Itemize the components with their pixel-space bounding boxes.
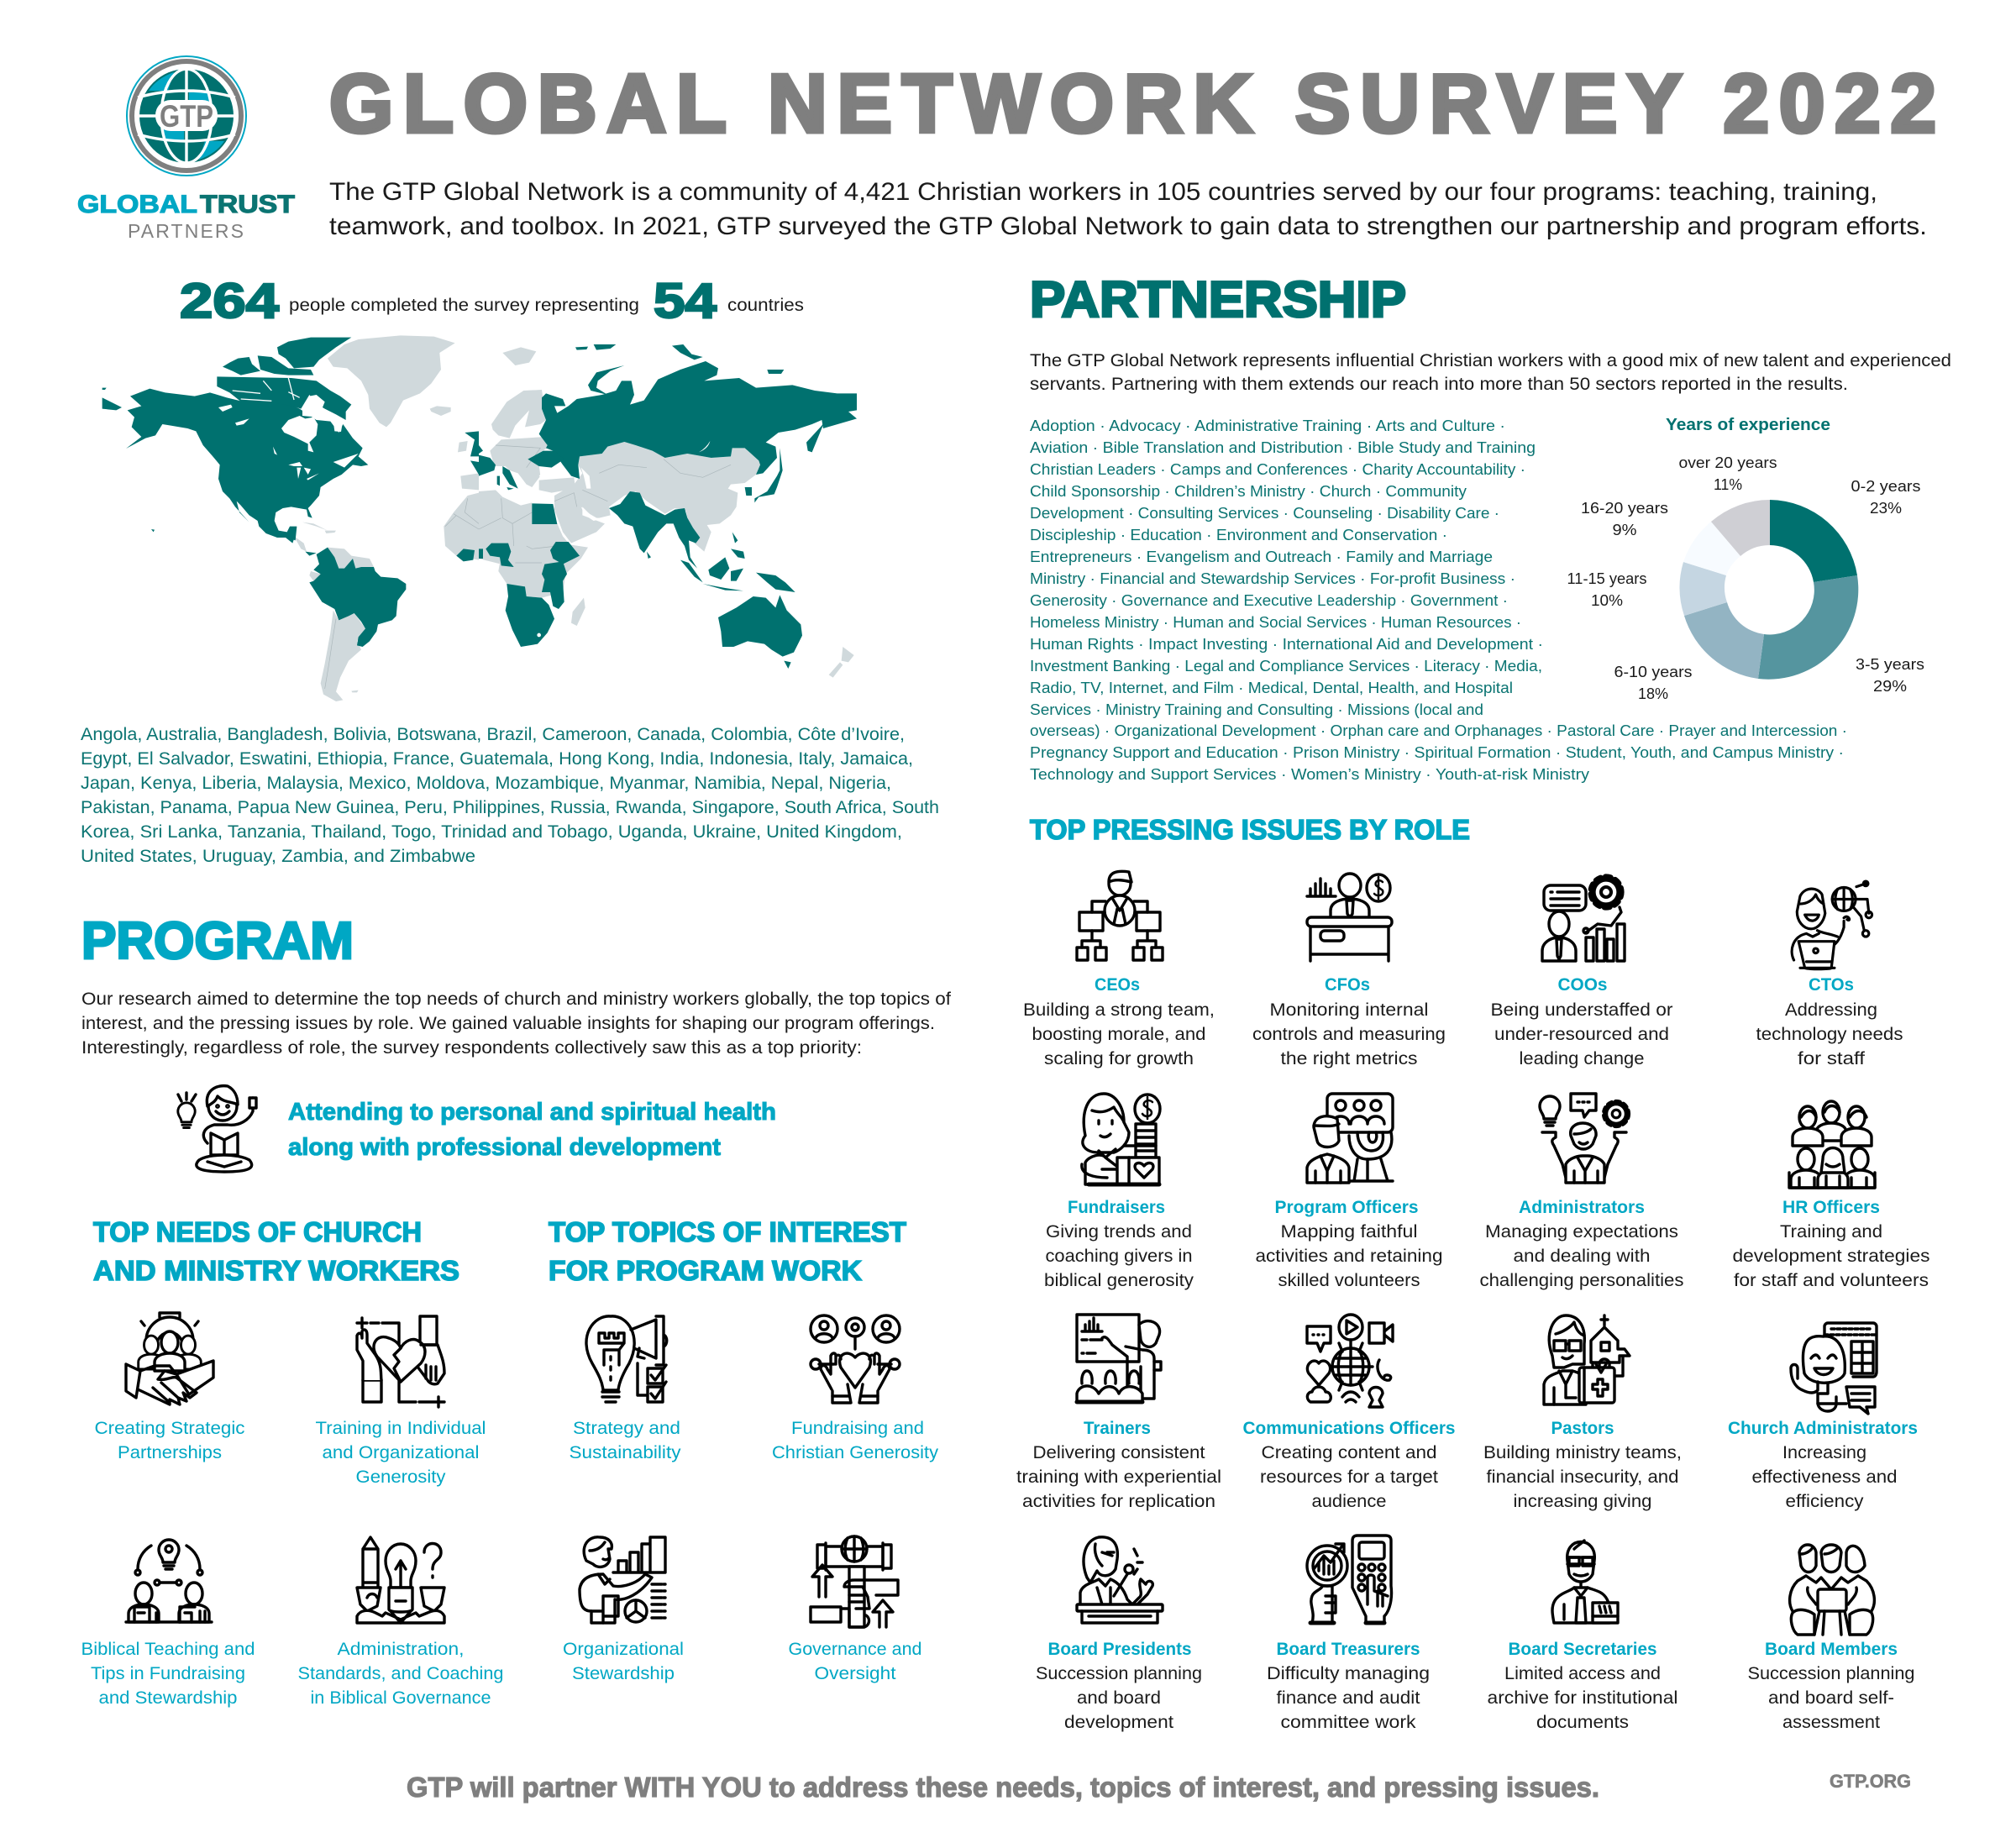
donut labels: 23%	[1870, 499, 1902, 517]
role: Board Treasurers: finance and audit	[1277, 1688, 1420, 1708]
callout: top priority	[288, 1099, 776, 1161]
icon: org chart person	[1077, 871, 1163, 960]
role: CFOs: the right metrics	[1280, 1049, 1418, 1068]
callout: top priority: Attending to personal and spiritual health	[288, 1099, 776, 1126]
needs and topics labels: Christian Generosity	[772, 1443, 939, 1462]
survey stats: 264	[180, 274, 279, 328]
intro paragraph: The GTP Global Network is a community of 4,421 Christian workers in 105 countries served by our four programs: teaching, training,	[329, 178, 1877, 206]
role: Church Administrators: Church Administrators	[1728, 1419, 1918, 1438]
role: Program Officers: activities and retaining	[1255, 1247, 1443, 1266]
country list: Japan, Kenya, Liberia, Malaysia, Mexico, Moldova, Mozambique, Myanmar, Namibia, Nepal, Nigeria,	[81, 774, 891, 793]
program intro paragraph: Our research aimed to determine the top needs of church and ministry workers globally, the top topics of	[81, 990, 951, 1009]
role: Communications Officers	[1243, 1315, 1455, 1511]
sector list: Child Sponsorship · Children’s Ministry · Church · Community	[1030, 482, 1467, 500]
needs and topics labels: Training in Individual	[316, 1419, 486, 1438]
role: Communications Officers: Creating content and	[1262, 1443, 1436, 1462]
role: COOs: under-resourced and	[1494, 1025, 1669, 1044]
heading: partnership: PARTNERSHIP	[1030, 271, 1406, 328]
donut labels: 29%	[1873, 677, 1907, 695]
needs and topics labels: Sustainability	[570, 1443, 681, 1462]
icon: man with glasses and folder	[1552, 1541, 1618, 1623]
role: Board Members	[1747, 1545, 1915, 1732]
survey stats: 54	[654, 274, 717, 328]
needs and topics labels: Stewardship	[572, 1664, 675, 1683]
partnership paragraph: The GTP Global Network represents influential Christian workers with a good mix of new talent and experienced	[1030, 351, 1951, 370]
world map	[102, 335, 857, 701]
role: Fundraisers: coaching givers in	[1045, 1247, 1193, 1266]
heading: program: PROGRAM	[81, 912, 354, 970]
role: COOs: Being understaffed or	[1490, 1000, 1673, 1020]
role: HR Officers: development strategies	[1732, 1247, 1930, 1266]
icon: bulb with rook and megaphone	[586, 1316, 667, 1402]
needs and topics labels: Administration,	[338, 1640, 464, 1659]
icon: group of staff	[1789, 1101, 1875, 1188]
role: Administrators: Administrators	[1519, 1198, 1645, 1217]
role: Administrators: and dealing with	[1514, 1247, 1650, 1266]
role: Board Treasurers: Board Treasurers	[1277, 1640, 1420, 1659]
icon: woman with coins and heart box	[1082, 1094, 1160, 1184]
role: Pastors	[1483, 1315, 1682, 1511]
logo: Global Trust Partners: GTP	[160, 99, 213, 134]
role: Pastors: Pastors	[1551, 1419, 1614, 1438]
program intro paragraph	[81, 990, 951, 1058]
role: Board Treasurers: Difficulty managing	[1267, 1664, 1430, 1683]
role: HR Officers	[1732, 1101, 1930, 1290]
heading: top needs: TOP NEEDS OF CHURCH	[93, 1216, 422, 1247]
role: Board Members: Succession planning	[1747, 1664, 1915, 1683]
role: Church Administrators: Increasing	[1782, 1443, 1866, 1462]
icon: heart and hands	[357, 1316, 444, 1407]
role: Board Secretaries: archive for institutional	[1487, 1688, 1678, 1708]
role: Administrators: Managing expectations	[1485, 1222, 1678, 1242]
role: Pastors: increasing giving	[1514, 1492, 1651, 1511]
donut labels: 10%	[1591, 591, 1623, 609]
role: Board Presidents	[1036, 1537, 1202, 1732]
role: Board Presidents: development	[1064, 1713, 1173, 1732]
donut labels: 16-20 years	[1581, 499, 1668, 517]
program intro paragraph: Interestingly, regardless of role, the survey respondents collectively saw this as a top priority:	[81, 1038, 862, 1058]
needs and topics labels: in Biblical Governance	[311, 1688, 491, 1708]
icon: board around a table	[1790, 1545, 1874, 1635]
country list: United States, Uruguay, Zambia, and Zimbabwe	[81, 847, 475, 866]
role: COOs: leading change	[1519, 1049, 1645, 1068]
sector list: Homeless Ministry · Human and Social Services · Human Resources ·	[1030, 613, 1521, 631]
donut chart: years of experience	[1680, 500, 1858, 680]
role: COOs: COOs	[1557, 975, 1608, 995]
program intro paragraph: interest, and the pressing issues by role. We gained valuable insights for shaping our program offerings.	[81, 1014, 935, 1033]
role: Trainers: activities for replication	[1022, 1492, 1215, 1511]
country list	[81, 725, 939, 866]
role: Church Administrators: effectiveness and	[1752, 1467, 1897, 1487]
role: Pastors: financial insecurity, and	[1487, 1467, 1678, 1487]
closing statement: GTP will partner WITH YOU to address these needs, topics of interest, and pressing issues.	[407, 1772, 1599, 1803]
icon: pastor with church and bible	[1544, 1315, 1630, 1404]
donut labels: 3-5 years	[1856, 655, 1924, 673]
donut labels: 18%	[1638, 685, 1668, 702]
sector list: Development · Consulting Services · Counseling · Disability Care ·	[1030, 504, 1499, 522]
needs and topics labels: Oversight	[815, 1664, 896, 1683]
icon: woman speaking at lectern	[1077, 1537, 1163, 1623]
heading: top topics: TOP TOPICS OF INTEREST	[549, 1216, 906, 1247]
icon: presenter, group and target	[1307, 1094, 1393, 1183]
sector list	[1030, 417, 1847, 783]
donut labels: over 20 years	[1678, 454, 1777, 471]
needs and topics labels	[81, 1419, 939, 1708]
sector list: Services · Ministry Training and Consulting · Missions (local and	[1030, 701, 1483, 718]
donut labels: 0-2 years	[1851, 477, 1920, 495]
needs and topics labels: Biblical Teaching and	[81, 1640, 255, 1659]
role: Fundraisers	[1044, 1094, 1194, 1290]
role: Program Officers	[1255, 1094, 1443, 1290]
role: Program Officers: skilled volunteers	[1278, 1271, 1420, 1290]
sector list: Technology and Support Services · Women’s Ministry · Youth-at-risk Ministry	[1030, 765, 1590, 783]
icon: smiling woman with calendar	[1791, 1323, 1877, 1414]
callout: top priority: along with professional development	[288, 1134, 721, 1161]
needs and topics labels: Standards, and Coaching	[297, 1664, 504, 1683]
role: CFOs: Monitoring internal	[1270, 1000, 1428, 1020]
heading: top topics	[549, 1216, 906, 1286]
role: CTOs: for staff	[1798, 1049, 1865, 1068]
role: Administrators: challenging personalities	[1480, 1271, 1683, 1290]
intro paragraph: teamwork, and toolbox. In 2021, GTP surveyed the GTP Global Network to gain data to strengthen our partnership and program efforts.	[329, 213, 1927, 240]
sector list: Human Rights · Impact Investing · International Aid and Development ·	[1030, 635, 1543, 653]
country list: Angola, Australia, Bangladesh, Bolivia, Botswana, Brazil, Cameroon, Canada, Colombia, Côte d’Ivoire,	[81, 725, 905, 744]
role: CTOs: technology needs	[1756, 1025, 1903, 1044]
heading: top needs: AND MINISTRY WORKERS	[93, 1255, 459, 1286]
country list: Korea, Sri Lanka, Tanzania, Thailand, Togo, Trinidad and Tobago, Uganda, Ukraine, United Kingdom,	[81, 822, 902, 842]
partnership paragraph	[1030, 351, 1951, 394]
role: Program Officers: Mapping faithful	[1280, 1222, 1418, 1242]
role: Board Members: and board self-	[1768, 1688, 1894, 1708]
icon: two readers with a bulb	[126, 1540, 212, 1622]
partnership paragraph: servants. Partnering with them extends our reach into more than 50 sectors reported in the results.	[1030, 375, 1848, 394]
sector list: Adoption · Advocacy · Administrative Training · Arts and Culture ·	[1030, 417, 1505, 434]
sector list: Pregnancy Support and Education · Prison Ministry · Spiritual Formation · Student, Youth, and Campus Ministry ·	[1030, 743, 1844, 761]
icon: person at desk with chart and coin	[1307, 874, 1392, 961]
role: Board Presidents: and board	[1077, 1688, 1161, 1708]
icon: trainer at board with audience	[1077, 1315, 1161, 1402]
survey stats: people completed the survey representing	[289, 296, 639, 315]
role: Board Members: Board Members	[1765, 1640, 1898, 1659]
needs and topics labels: Organizational	[563, 1640, 684, 1659]
title: GLOBAL NETWORK SURVEY 2022	[329, 57, 1936, 150]
role: Fundraisers: Giving trends and	[1046, 1222, 1192, 1242]
logo: Global Trust Partners	[77, 56, 295, 242]
sector list: Generosity · Governance and Executive Leadership · Government ·	[1030, 591, 1508, 609]
sector list: Investment Banking · Legal and Compliance Services · Literacy · Media,	[1030, 657, 1542, 675]
role: HR Officers: HR Officers	[1782, 1198, 1880, 1217]
role: CEOs: CEOs	[1095, 975, 1140, 995]
role: Board Treasurers	[1267, 1536, 1430, 1732]
role: Pastors: Building ministry teams,	[1483, 1443, 1682, 1462]
role: Fundraisers: Fundraisers	[1068, 1198, 1165, 1217]
sector list: Aviation · Bible Translation and Distribution · Bible Study and Training	[1030, 438, 1536, 456]
role: CEOs: Building a strong team,	[1023, 1000, 1215, 1020]
needs and topics labels: Creating Strategic	[94, 1419, 245, 1438]
sector list: Christian Leaders · Camps and Conferences · Charity Accountability ·	[1030, 460, 1525, 478]
needs and topics labels: Strategy and	[573, 1419, 680, 1438]
country list: Egypt, El Salvador, Eswatini, Ethiopia, France, Guatemala, Hong Kong, India, Indonesia, Italy, Jamaica,	[81, 749, 913, 769]
role: CEOs: boosting morale, and	[1032, 1025, 1206, 1044]
sector list: Radio, TV, Internet, and Film · Medical, Dental, Health, and Hospital	[1030, 679, 1513, 696]
role: Church Administrators: efficiency	[1786, 1492, 1864, 1511]
needs and topics labels: Tips in Fundraising	[91, 1664, 245, 1683]
role: CEOs	[1023, 871, 1215, 1068]
role: Fundraisers: biblical generosity	[1044, 1271, 1194, 1290]
logo: Global Trust Partners: GLOBAL	[77, 191, 197, 218]
country list: Pakistan, Panama, Papua New Guinea, Peru, Philippines, Russia, Rwanda, Singapore, South Africa, South	[81, 798, 939, 817]
needs and topics labels: and Organizational	[323, 1443, 479, 1462]
role: Board Secretaries: Limited access and	[1504, 1664, 1661, 1683]
role: HR Officers: for staff and volunteers	[1734, 1271, 1929, 1290]
role: Board Secretaries	[1487, 1541, 1678, 1732]
role: CFOs: controls and measuring	[1252, 1025, 1446, 1044]
icon: person presenting bars and pie	[580, 1537, 665, 1623]
role: Board Presidents: Board Presidents	[1048, 1640, 1191, 1659]
survey stats: countries	[727, 296, 804, 315]
role: Program Officers: Program Officers	[1275, 1198, 1418, 1217]
website: GTP.ORG	[1830, 1771, 1911, 1792]
role: HR Officers: Training and	[1780, 1222, 1882, 1242]
icon: fundraising hands and heart	[811, 1315, 900, 1403]
role: COOs	[1490, 877, 1673, 1068]
role: Board Members: assessment	[1782, 1713, 1880, 1732]
icon: globe surrounded by media	[1307, 1315, 1393, 1407]
logo: Global Trust Partners: TRUST	[200, 191, 295, 218]
donut labels: 6-10 years	[1614, 663, 1692, 680]
role: CTOs: CTOs	[1809, 975, 1854, 995]
role: Trainers: training with experiential	[1016, 1467, 1221, 1487]
icon: person meditating with book and bulb	[178, 1086, 256, 1172]
role: CTOs	[1756, 881, 1903, 1068]
role: Church Administrators	[1728, 1323, 1918, 1511]
heading: top topics: FOR PROGRAM WORK	[549, 1255, 862, 1286]
role: Trainers: Trainers	[1084, 1419, 1151, 1438]
icon: gavel and handshake	[811, 1536, 898, 1627]
role: Administrators	[1480, 1094, 1683, 1290]
role: Trainers: Delivering consistent	[1033, 1443, 1205, 1462]
role: Board Treasurers: committee work	[1280, 1713, 1416, 1732]
icon: technologist with laptop and globe	[1792, 881, 1872, 969]
role: CFOs: CFOs	[1325, 975, 1370, 995]
icon: calculator, magnifier and hands	[1307, 1536, 1392, 1623]
needs and topics labels: Fundraising and	[791, 1419, 924, 1438]
icon: person juggling ideas	[1540, 1094, 1628, 1183]
needs and topics labels: Governance and	[788, 1640, 922, 1659]
sector list: Entrepreneurs · Evangelism and Outreach · Family and Marriage	[1030, 548, 1493, 565]
icon: handshake with gear and team	[126, 1313, 213, 1404]
role: Communications Officers: resources for a target	[1260, 1467, 1438, 1487]
role: Communications Officers: audience	[1312, 1492, 1386, 1511]
survey stats	[180, 274, 804, 328]
role: Board Presidents: Succession planning	[1036, 1664, 1202, 1683]
chart title: years of experience: Years of experience	[1666, 416, 1830, 434]
role: Trainers	[1016, 1315, 1221, 1511]
role: Communications Officers: Communications Officers	[1243, 1419, 1455, 1438]
sector list: Ministry · Financial and Stewardship Services · For-profit Business ·	[1030, 570, 1515, 587]
donut labels	[1567, 454, 1924, 702]
icon: pencil, bulb, question and team	[357, 1537, 444, 1623]
needs and topics labels: Partnerships	[118, 1443, 222, 1462]
sector list: Discipleship · Education · Environment and Conservation ·	[1030, 526, 1447, 543]
donut labels: 11%	[1714, 475, 1742, 493]
sector list: overseas) · Organizational Development · Orphan care and Orphanages · Pastoral Care · Prayer and Intercession ·	[1030, 722, 1847, 739]
role: CTOs: Addressing	[1785, 1000, 1877, 1020]
logo: Global Trust Partners: PARTNERS	[128, 220, 244, 242]
needs and topics labels: and Stewardship	[99, 1688, 237, 1708]
donut labels: 11-15 years	[1567, 570, 1646, 587]
donut labels: 9%	[1613, 521, 1636, 538]
heading: top pressing issues by role: TOP PRESSING ISSUES BY ROLE	[1030, 814, 1470, 845]
heading: top needs	[93, 1216, 459, 1286]
icon: person with gear and bars	[1542, 877, 1625, 961]
role: CEOs: scaling for growth	[1044, 1049, 1194, 1068]
role: Board Secretaries: Board Secretaries	[1509, 1640, 1656, 1659]
needs and topics labels: Generosity	[356, 1467, 446, 1487]
intro paragraph	[329, 178, 1927, 240]
role: Board Secretaries: documents	[1536, 1713, 1629, 1732]
role: CFOs	[1252, 874, 1446, 1068]
